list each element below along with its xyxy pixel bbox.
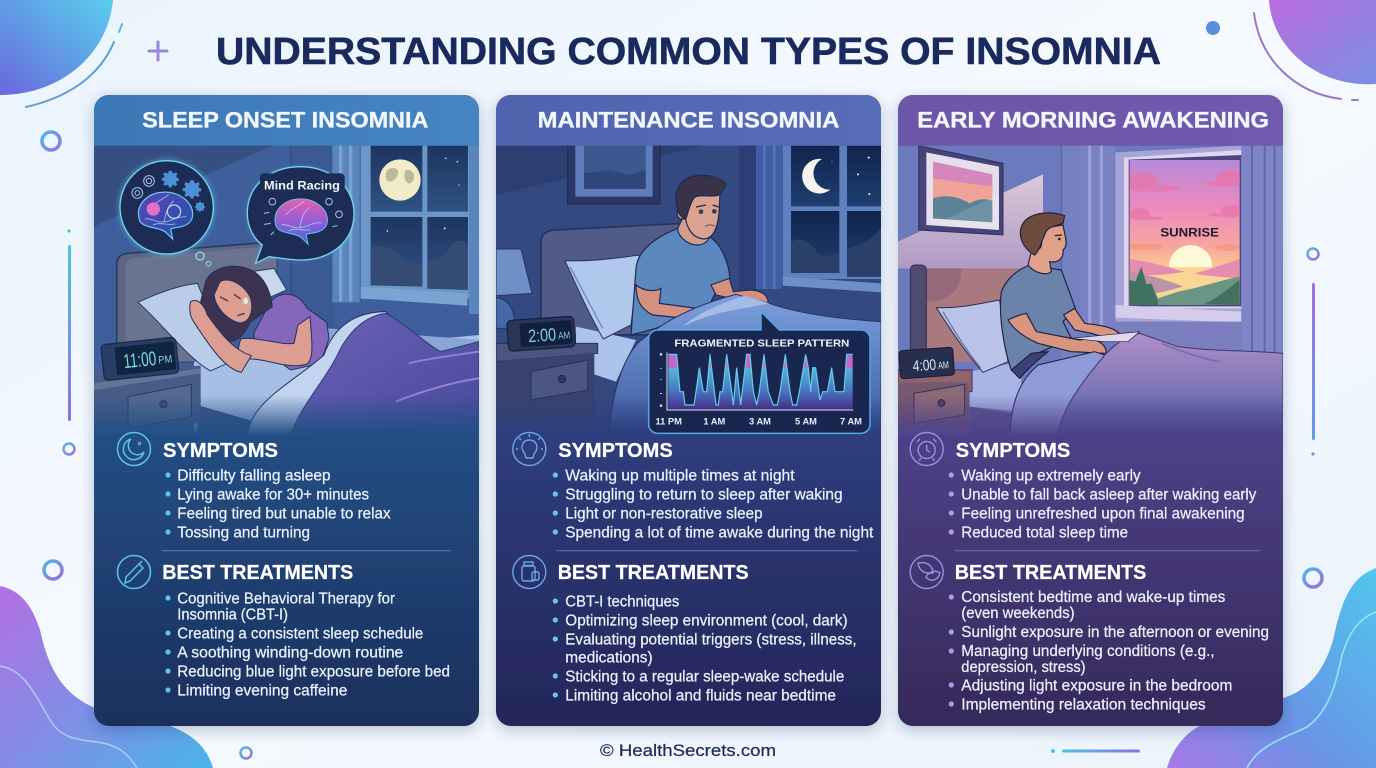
- wall picture: [568, 142, 660, 204]
- symptoms list: Struggling to return to sleep after waking: [565, 486, 843, 504]
- top-left blob: [0, 0, 113, 95]
- symptoms list: Spending a lot of time awake during the night: [565, 524, 874, 542]
- callout: fragmented sleep pattern chart: 5 AM: [795, 416, 817, 426]
- blanket: [248, 311, 392, 433]
- illustration fade: [898, 395, 1283, 435]
- treatments list: Managing underlying conditions (e.g.,: [961, 643, 1215, 660]
- treatments list: [949, 589, 1269, 714]
- pillows: [251, 268, 287, 298]
- symptoms list: Feeling tired but unable to relax: [177, 506, 391, 522]
- panel heading: EARLY MORNING AWAKENING: [917, 107, 1269, 132]
- top-right dot: [1206, 21, 1220, 35]
- bottom-left curve: [0, 666, 137, 768]
- panel heading: MAINTENANCE INSOMNIA: [538, 107, 839, 132]
- bottom-right curve: [1247, 612, 1376, 768]
- panel: early morning awakening: [898, 95, 1283, 726]
- title: UNDERSTANDING COMMON TYPES OF INSOMNIA: [216, 31, 1161, 73]
- pillow: [936, 300, 1008, 372]
- nightstand: [898, 370, 972, 429]
- headboard: [117, 242, 277, 362]
- footer credit: © HealthSecrets.com: [600, 741, 776, 760]
- bed sheet: [194, 335, 479, 435]
- treatments list: Insomnia (CBT-I): [177, 606, 288, 624]
- panel: sleep onset insomnia: [94, 95, 479, 726]
- alarm clock 4:00 AM: [899, 347, 955, 379]
- wall picture: [918, 146, 1006, 236]
- nightstand: [94, 366, 201, 428]
- panel: maintenance insomnia: [496, 95, 881, 726]
- treatments heading: BEST TREATMENTS: [955, 561, 1146, 584]
- panel body: [94, 95, 479, 726]
- callout: fragmented sleep pattern chart: FRAGMENTED SLEEP PATTERN: [674, 339, 849, 350]
- treatments list: [165, 590, 450, 700]
- symptoms icon: light bulb: [513, 432, 546, 466]
- symptoms list: Feeling unrefreshed upon final awakening: [961, 506, 1245, 522]
- treatments list: [553, 594, 857, 704]
- panel header bar: [94, 95, 479, 146]
- bottom-right blob: [1167, 568, 1376, 768]
- blanket: [1010, 352, 1105, 435]
- window at night with moon: [332, 146, 479, 314]
- headboard: [926, 268, 1021, 362]
- symptoms list: Difficulty falling asleep: [177, 468, 331, 484]
- treatments list: CBT-I techniques: [565, 594, 680, 610]
- speech bubble: mind racing: Mind Racing: [264, 178, 340, 192]
- sunrise label: SUNRISE: [1160, 226, 1219, 240]
- nightstand: [496, 343, 598, 423]
- headboard: [541, 223, 683, 335]
- alarm clock 2:00 AM: [507, 316, 575, 351]
- treatments list: Sticking to a regular sleep-wake schedule: [565, 668, 844, 686]
- callout: fragmented sleep pattern chart: 11 PM: [655, 416, 682, 426]
- side lines: [67, 229, 1315, 753]
- bottom-left blob: [0, 586, 213, 768]
- panel body: [496, 95, 881, 726]
- treatments list: Evaluating potential triggers (stress, illness,: [565, 632, 857, 648]
- woman: [190, 266, 329, 372]
- treatments list: Creating a consistent sleep schedule: [177, 626, 423, 642]
- man: [631, 175, 768, 335]
- treatments list: A soothing winding-down routine: [177, 644, 403, 662]
- symptoms heading: SYMPTOMS: [558, 439, 673, 462]
- alarm clock 2:00 AM: 2:00: [527, 324, 557, 346]
- blanket: [609, 294, 881, 435]
- symptoms icon: alarm clock: [910, 432, 943, 466]
- speech bubble: mind racing: [247, 167, 354, 263]
- illustration fade: [94, 395, 479, 435]
- alarm clock 11:00 PM: 11:00: [123, 348, 157, 373]
- treatments list: Adjusting light exposure in the bedroom: [961, 678, 1232, 694]
- treatments list: medications): [565, 650, 653, 666]
- callout: fragmented sleep pattern chart: 7 AM: [840, 416, 862, 426]
- alarm clock 11:00 PM: [101, 337, 179, 381]
- mattress: [970, 362, 1021, 412]
- top-right blob: [1269, 0, 1376, 84]
- symptoms list: Unable to fall back asleep after waking early: [961, 486, 1257, 504]
- treatments icon: leaves: [910, 556, 943, 588]
- treatments list: Implementing relaxation techniques: [961, 696, 1206, 714]
- sunrise window: [1081, 146, 1283, 352]
- plus icon: [149, 42, 167, 60]
- panel header bar: [898, 95, 1283, 146]
- window with crescent moon: [756, 146, 881, 292]
- illustration: woman awake in bed with racing mind: [94, 146, 479, 435]
- panel body: [898, 95, 1283, 726]
- thought bubble: gears and brain: [118, 159, 215, 266]
- callout: fragmented sleep pattern chart: [649, 312, 870, 433]
- illustration: man watching the sunrise: [898, 146, 1283, 435]
- alarm clock 4:00 AM: 4:00: [912, 357, 937, 375]
- top-left arc: [26, 24, 122, 107]
- lamp: [496, 249, 532, 328]
- callout: fragmented sleep pattern chart: 3 AM: [749, 416, 771, 426]
- mattress: [576, 327, 636, 382]
- symptoms heading: SYMPTOMS: [163, 439, 278, 462]
- symptoms list: Waking up multiple times at night: [565, 468, 795, 484]
- illustration: man sitting up at 2 AM: [496, 142, 881, 435]
- treatments list: Consistent bedtime and wake-up times: [961, 589, 1226, 606]
- treatments list: depression, stress): [961, 659, 1086, 676]
- symptoms list: Light or non-restorative sleep: [565, 506, 763, 522]
- treatments heading: BEST TREATMENTS: [162, 561, 353, 584]
- treatments list: Cognitive Behavioral Therapy for: [177, 590, 395, 608]
- treatments list: Sunlight exposure in the afternoon or evening: [961, 624, 1269, 641]
- treatments list: Reducing blue light exposure before bed: [177, 664, 450, 680]
- alarm clock 2:00 AM: AM: [558, 330, 571, 342]
- symptoms list: [165, 468, 391, 542]
- symptoms list: Reduced total sleep time: [961, 524, 1128, 542]
- man: [1000, 213, 1122, 378]
- pillow: [565, 255, 639, 339]
- treatments heading: BEST TREATMENTS: [558, 561, 749, 584]
- callout: fragmented sleep pattern chart: 1 AM: [703, 416, 726, 426]
- ring markers: [42, 132, 1322, 758]
- panel heading: SLEEP ONSET INSOMNIA: [142, 107, 428, 132]
- treatments icon: medicine bottles: [513, 556, 546, 588]
- panel header bar: [496, 95, 881, 146]
- symptoms list: Tossing and turning: [177, 524, 310, 542]
- treatments list: Limiting evening caffeine: [177, 682, 347, 700]
- symptoms icon: moon: [118, 432, 150, 466]
- symptoms list: [949, 468, 1257, 542]
- alarm clock 11:00 PM: PM: [158, 353, 173, 367]
- top-right arc: [1254, 13, 1358, 100]
- symptoms list: Waking up extremely early: [961, 468, 1141, 484]
- illustration fade: [496, 402, 881, 435]
- treatments list: (even weekends): [961, 605, 1075, 622]
- alarm clock 4:00 AM: AM: [938, 360, 949, 372]
- treatments list: Limiting alcohol and fluids near bedtime: [565, 688, 836, 704]
- symptoms heading: SYMPTOMS: [956, 439, 1070, 462]
- treatments list: Optimizing sleep environment (cool, dark): [565, 612, 848, 630]
- symptoms list: [553, 468, 874, 542]
- symptoms list: Lying awake for 30+ minutes: [177, 486, 369, 504]
- treatments icon: pen: [118, 556, 150, 588]
